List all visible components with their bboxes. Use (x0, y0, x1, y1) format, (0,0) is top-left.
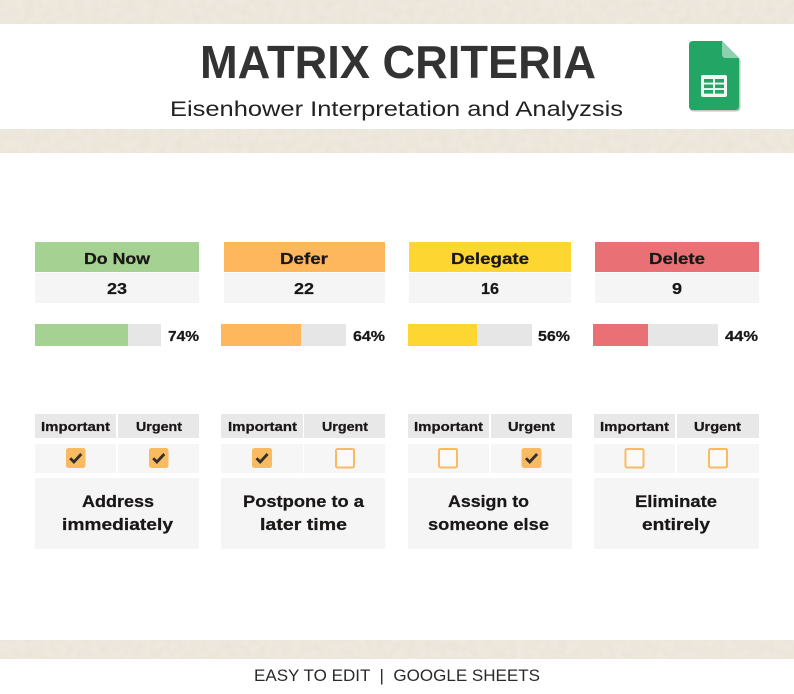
panel: Do Now criteria (35, 414, 199, 549)
panel: Do Now criteria: Important (41, 419, 111, 434)
panel: Delete summary: Delete (649, 251, 705, 268)
progress bar: Defer 64%: 64% (353, 328, 385, 345)
panel: Defer criteria: Postpone to a (243, 492, 365, 511)
progress bar: Delegate 56%: 56% (538, 328, 570, 345)
panel: Defer criteria: Important (228, 419, 298, 434)
panel: Delete criteria: entirely (642, 515, 711, 534)
progress bar: Delete 44%: 44% (725, 328, 758, 345)
panel: Defer summary: 22 (294, 281, 314, 298)
panel: Defer criteria (221, 414, 385, 549)
panel: Defer summary (224, 242, 385, 303)
progress bar: Do Now 74% (35, 324, 199, 346)
checkbox: Important checked (66, 448, 86, 468)
panel: Delegate criteria (408, 414, 572, 549)
panel: Do Now criteria: Address (82, 492, 154, 511)
panel: Defer criteria: later time (260, 515, 347, 534)
panel: Delegate criteria: someone else (428, 515, 549, 534)
panel: Delegate summary (409, 242, 571, 303)
progress bar: Delete 44% (593, 324, 758, 346)
panel: Delegate criteria: Urgent (508, 419, 556, 434)
panel: Do Now summary: Do Now (84, 251, 151, 268)
checkbox: Urgent checked (522, 448, 542, 468)
band: paper strip above footer (0, 640, 794, 659)
subtitle: Eisenhower Interpretation and Analyzsis (170, 98, 623, 121)
panel: Delete criteria: Urgent (694, 419, 742, 434)
panel: Defer criteria: Urgent (322, 419, 369, 434)
checkbox: Important empty (439, 449, 457, 468)
progress bar: Do Now 74%: 74% (168, 328, 199, 345)
checkbox: Urgent empty (709, 449, 727, 468)
panel: Delete criteria (594, 414, 759, 549)
panel: Delete criteria: Eliminate (635, 492, 717, 511)
band: top paper strip (0, 0, 794, 24)
title: MATRIX CRITERIA (200, 36, 596, 88)
checkbox: Important empty (626, 449, 644, 468)
panel: Delegate summary: Delegate (451, 251, 529, 268)
checkbox: Important checked (252, 448, 272, 468)
panel: Delete criteria: Important (600, 419, 670, 434)
panel: Do Now summary: 23 (107, 281, 127, 298)
panel: Defer summary: Defer (280, 251, 328, 268)
panel: Do Now criteria: immediately (62, 515, 174, 534)
panel: Delete summary (595, 242, 759, 303)
panel: Do Now criteria: Urgent (136, 419, 183, 434)
progress bar: Defer 64% (221, 324, 385, 346)
footer text: EASY TO EDIT | GOOGLE SHEETS (254, 666, 540, 685)
checkbox: Urgent empty (336, 449, 354, 468)
checkbox: Urgent checked (149, 448, 168, 468)
panel: Delegate summary: 16 (481, 281, 499, 298)
progress bar: Delegate 56% (408, 324, 570, 346)
icon: Google Sheets (689, 41, 740, 112)
panel: Delegate criteria: Assign to (448, 492, 529, 511)
panel: Delegate criteria: Important (414, 419, 484, 434)
band: paper strip under header (0, 129, 794, 153)
panel: Delete summary: 9 (672, 281, 682, 298)
panel: Do Now summary (35, 242, 199, 303)
